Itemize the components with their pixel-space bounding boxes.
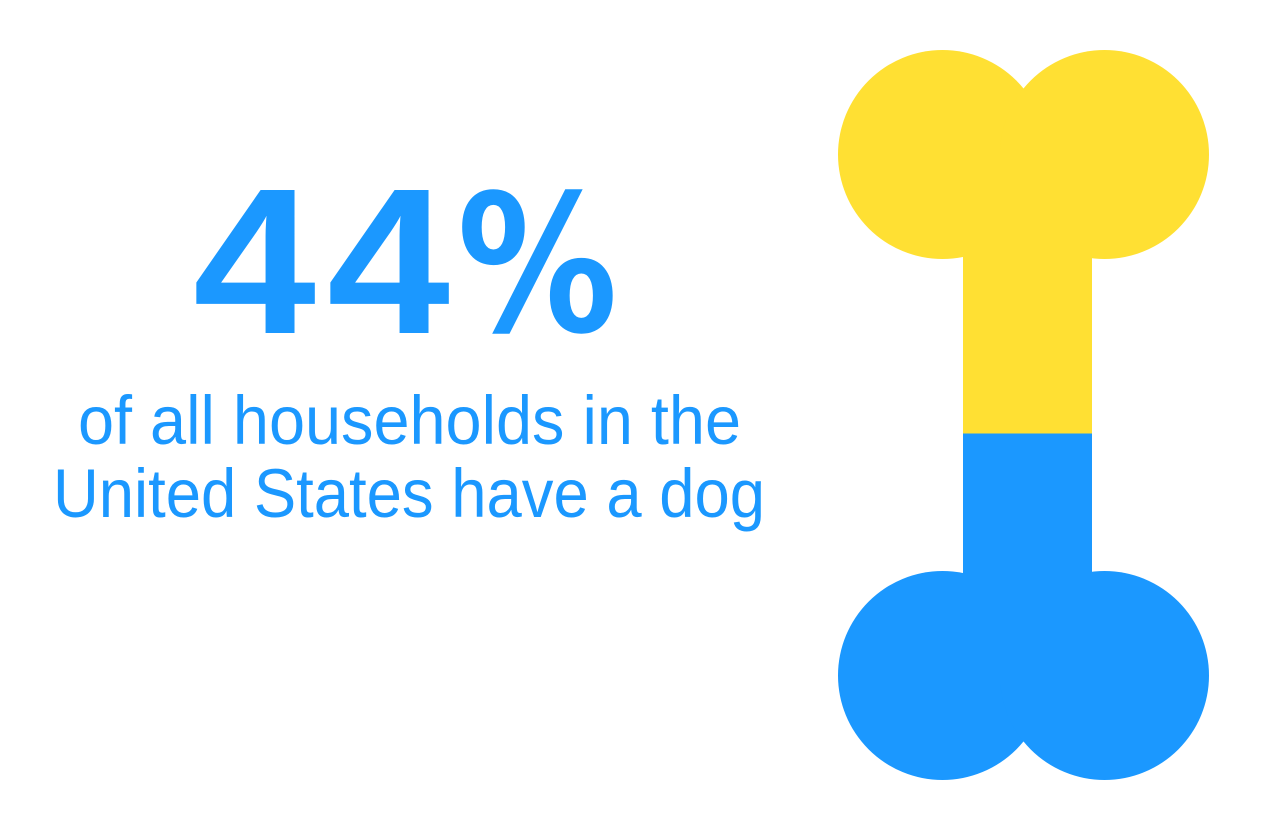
headline statistic: 44% bbox=[193, 145, 618, 378]
bone top: yellow part bbox=[838, 50, 1209, 434]
bone bottom: blue part bbox=[838, 434, 1209, 780]
headline statistic: 44%: % bbox=[457, 153, 618, 376]
description text: United States have a dog bbox=[53, 455, 765, 532]
icon: bone filled 44 percent in blue bbox=[838, 50, 1209, 780]
headline statistic: 44%: 4 bbox=[193, 145, 316, 378]
headline statistic: 44%: 4 bbox=[327, 145, 450, 378]
description text: of all households in the bbox=[78, 382, 741, 459]
description text bbox=[53, 382, 765, 532]
